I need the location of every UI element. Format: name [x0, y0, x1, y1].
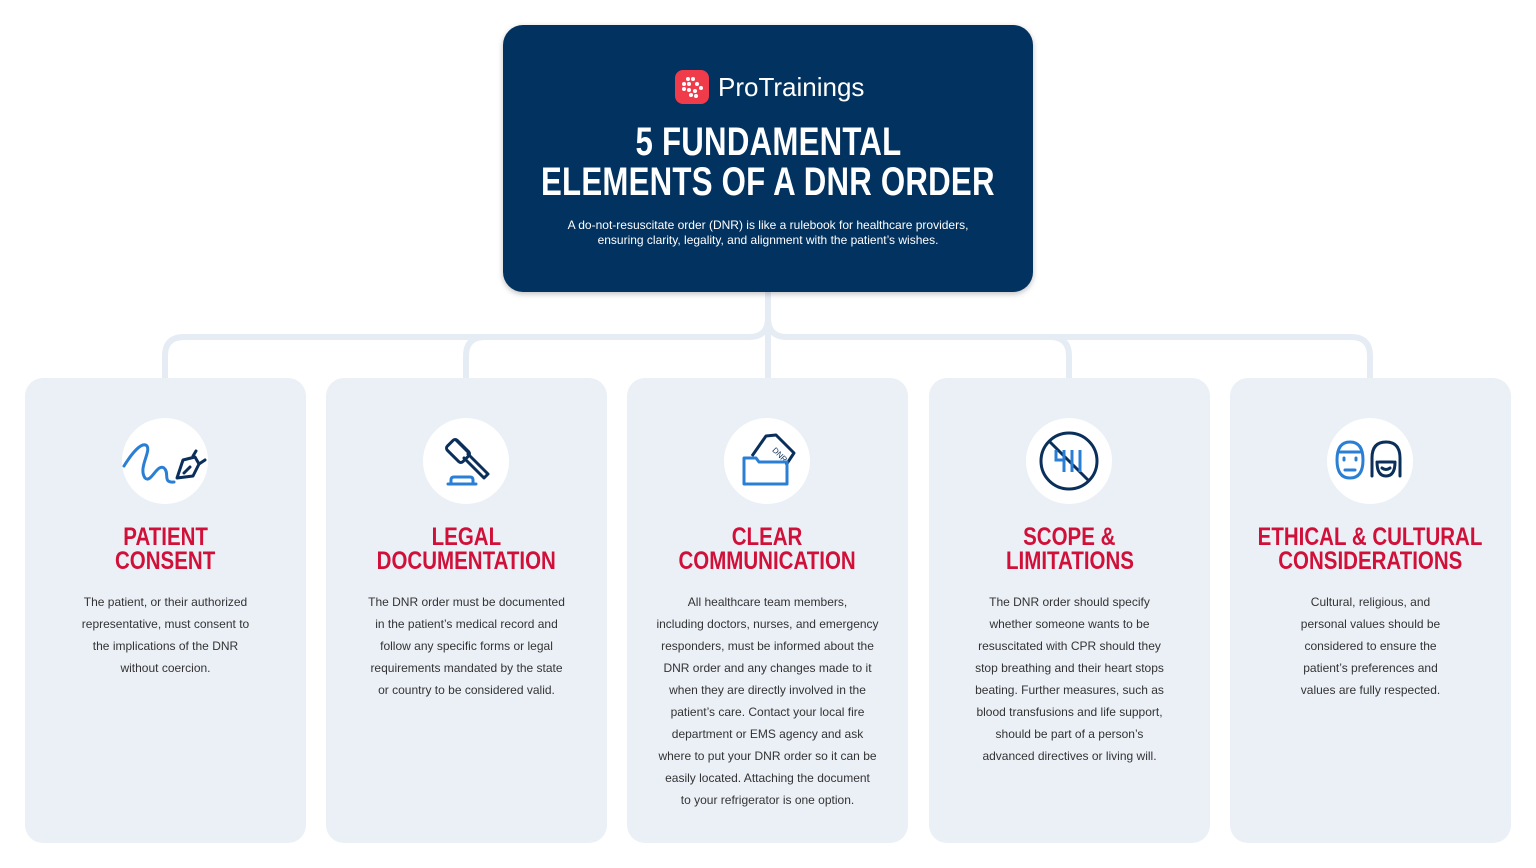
text: The DNR order must be documented	[368, 595, 565, 609]
text: responders, must be informed about the	[661, 639, 874, 653]
title	[541, 120, 995, 204]
title: DOCUMENTATION	[377, 547, 556, 575]
text: requirements mandated by the state	[370, 661, 563, 675]
text: patient’s care. Contact your local fire	[671, 705, 864, 719]
text: resuscitated with CPR should they	[978, 639, 1161, 653]
text: when they are directly involved in the	[669, 683, 866, 697]
icon: signature pen	[122, 418, 208, 504]
icon: DNR folder	[724, 418, 810, 504]
text: where to put your DNR order so it can be	[658, 749, 877, 763]
title: SCOPE &	[1023, 523, 1116, 551]
text: All healthcare team members,	[688, 595, 847, 609]
text: the implications of the DNR	[93, 639, 238, 653]
title: ETHICAL & CULTURAL	[1258, 523, 1483, 551]
title: CLEAR	[732, 523, 803, 551]
text: advanced directives or living will.	[982, 749, 1157, 763]
text: easily located. Attaching the document	[665, 771, 870, 785]
text: blood transfusions and life support,	[976, 705, 1163, 719]
text	[82, 595, 249, 675]
panel: patient consent	[25, 378, 306, 843]
title: LIMITATIONS	[1006, 547, 1133, 575]
text: stop breathing and their heart stops	[975, 661, 1164, 675]
text: beating. Further measures, such as	[975, 683, 1164, 697]
text: representative, must consent to	[82, 617, 249, 631]
icon: no 911	[1026, 418, 1112, 504]
text: Cultural, religious, and	[1311, 595, 1430, 609]
text: including doctors, nurses, and emergency	[656, 617, 879, 631]
panel: ethical & cultural	[1230, 378, 1511, 843]
text: personal values should be	[1301, 617, 1440, 631]
panel: scope & limitations	[929, 378, 1210, 843]
text: should be part of a person’s	[996, 727, 1143, 741]
text: whether someone wants to be	[989, 617, 1150, 631]
text: considered to ensure the	[1304, 639, 1437, 653]
icon: DNR folder: DNR	[770, 446, 789, 464]
text: patient’s preferences and	[1303, 661, 1438, 675]
title	[1006, 523, 1134, 575]
title: CONSIDERATIONS	[1278, 547, 1463, 575]
logo	[675, 70, 864, 104]
title: ELEMENTS OF A DNR ORDER	[541, 160, 995, 204]
title	[115, 523, 216, 575]
text: to your refrigerator is one option.	[681, 793, 854, 807]
title: COMMUNICATION	[679, 547, 856, 575]
subtitle	[568, 218, 968, 247]
subtitle: ensuring clarity, legality, and alignment with the patient’s wishes.	[598, 233, 938, 247]
text: follow any specific forms or legal	[380, 639, 553, 653]
text: or country to be considered valid.	[378, 683, 555, 697]
subtitle: A do-not-resuscitate order (DNR) is like a rulebook for healthcare providers,	[568, 218, 968, 232]
panel: legal documentation	[326, 378, 607, 843]
icon: two faces	[1327, 418, 1413, 504]
text	[975, 595, 1164, 763]
title: LEGAL	[432, 523, 501, 551]
title	[377, 523, 556, 575]
text: The DNR order should specify	[989, 595, 1150, 609]
logo: ProTrainings	[718, 72, 864, 102]
title: PATIENT	[123, 523, 208, 551]
title: 5 FUNDAMENTAL	[635, 120, 901, 164]
text: DNR order and any changes made to it	[663, 661, 872, 675]
text: in the patient’s medical record and	[375, 617, 558, 631]
text: values are fully respected.	[1301, 683, 1440, 697]
title	[1258, 523, 1483, 575]
text: The patient, or their authorized	[84, 595, 247, 609]
text: without coercion.	[120, 661, 211, 675]
title	[679, 523, 856, 575]
text	[368, 595, 565, 697]
text	[1300, 595, 1440, 697]
title: CONSENT	[115, 547, 216, 575]
header panel	[503, 25, 1033, 292]
panel: clear communication	[627, 378, 908, 843]
text	[656, 595, 879, 807]
text: department or EMS agency and ask	[672, 727, 863, 741]
icon: gavel	[423, 418, 509, 504]
